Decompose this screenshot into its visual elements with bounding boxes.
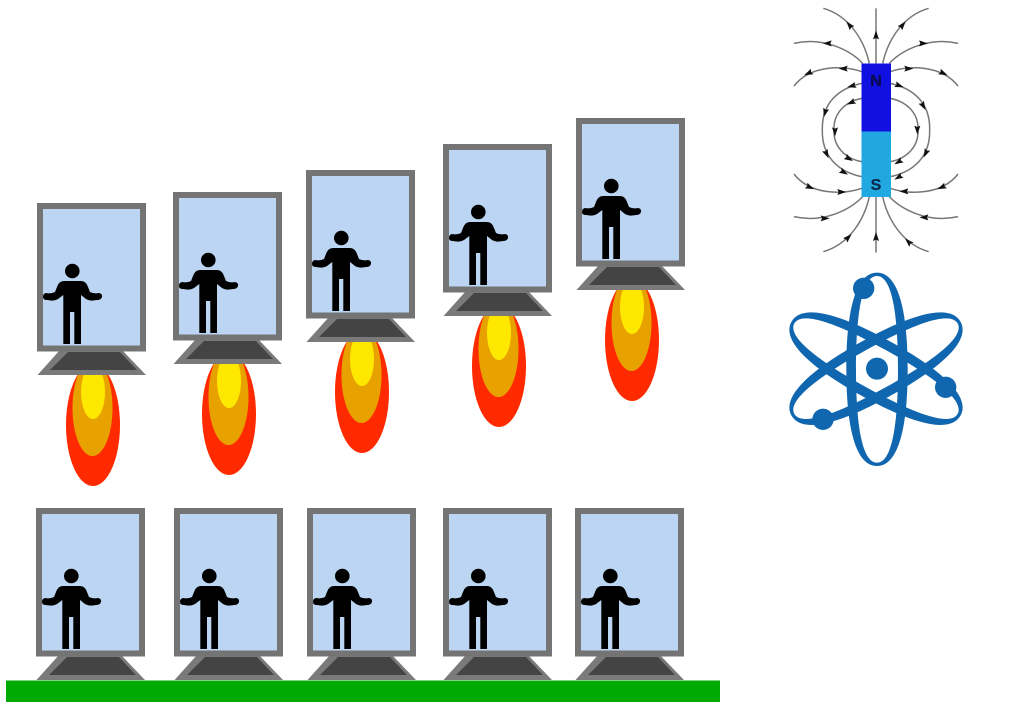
flame 1 [66, 360, 120, 486]
orbit tilted right [777, 295, 975, 442]
orbit tilted left [777, 295, 975, 442]
ground [6, 680, 720, 702]
capsule with person 3 [306, 173, 415, 342]
vertical orbit [846, 273, 908, 466]
flame 5 [605, 275, 659, 401]
electron right [935, 377, 956, 398]
flame 3 [335, 327, 389, 453]
flying rocket 1 [38, 206, 146, 486]
capsule with person 4 [444, 147, 552, 316]
magnetic field lines [794, 8, 958, 253]
capsule with person 1 [38, 206, 146, 375]
flying rocket 2 [174, 195, 282, 475]
magnet south pole [862, 132, 891, 197]
grounded capsule 1 [36, 511, 145, 680]
flame 2 [202, 349, 256, 475]
icon: atom [777, 273, 975, 466]
capsule with person 2 [174, 195, 282, 364]
icon: bar magnet with field lines [794, 8, 958, 253]
flying rocket 3 [306, 173, 415, 453]
flying rocket 4 [444, 147, 552, 427]
grounded capsule 3 [308, 511, 416, 680]
electron top [853, 278, 874, 299]
nucleus [866, 358, 888, 380]
flame 4 [472, 301, 526, 427]
electron left [812, 409, 834, 430]
label N: N [870, 73, 882, 90]
grounded capsule 2 [174, 511, 283, 680]
magnet north pole [862, 64, 891, 132]
flying rocket 5 [576, 121, 685, 401]
grounded capsule 5 [576, 511, 684, 680]
grounded capsule 4 [444, 511, 552, 680]
label S: S [871, 177, 882, 194]
capsule with person 5 [576, 121, 685, 290]
